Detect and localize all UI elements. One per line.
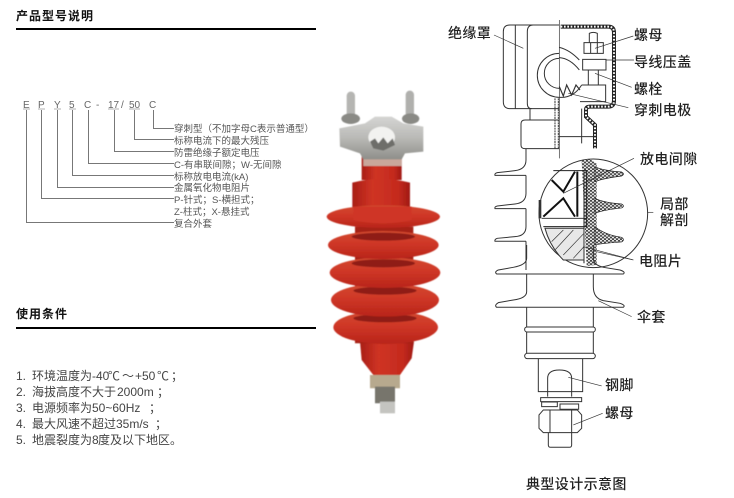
label: resistor disc: 电阻片 [639, 253, 682, 269]
label: shed housing: 伞套 [637, 309, 666, 325]
model code descriptions: 穿刺型（不加字母C表示普通型） [174, 123, 314, 135]
insulating cover [503, 20, 614, 158]
conditions list: +50 [135, 369, 156, 383]
label: insulating cover: 绝缘罩 [448, 25, 491, 41]
heading: operating conditions: 使用条件 [16, 306, 68, 321]
conditions list: 3. [16, 401, 26, 415]
model code descriptions: 复合外套 [174, 218, 213, 230]
body with left sheds [495, 149, 526, 270]
model code descriptions [174, 123, 314, 230]
conditions list: 4. [16, 417, 26, 431]
conditions list: 度及以下地区。 [98, 432, 182, 447]
heading: model designation: 产品型号说明 [16, 8, 94, 23]
label: discharge gap: 放电间隙 [640, 151, 698, 167]
conditions list: ； [157, 385, 169, 399]
label: partial section: 局部 [660, 196, 689, 212]
model code descriptions: Z-柱式；X-悬挂式 [174, 206, 250, 218]
model code descriptions: 防雷绝缘子额定电压 [174, 147, 260, 159]
conditions list [16, 368, 183, 447]
conditions list: 35m/s [116, 417, 149, 431]
model code letters: / [121, 100, 124, 111]
label: bolt: 螺栓 [634, 81, 663, 97]
lower body, sheds, foot and nut [496, 245, 624, 447]
model code descriptions: P-针式；S-横担式； [174, 194, 260, 206]
conditions list: 地震裂度为 [32, 432, 92, 447]
model code letters: - [96, 100, 99, 111]
model code descriptions: 标称放电电流(kA) [174, 171, 248, 183]
conditions list: 2000m [117, 385, 154, 399]
conditions list: 1. [16, 369, 26, 383]
label: wire clamp cover: 导线压盖 [634, 54, 692, 70]
cross-section design diagram [494, 20, 653, 447]
diagram caption: 典型设计示意图 [526, 476, 627, 492]
label: steel foot: 钢脚 [605, 377, 634, 393]
model code letters [23, 100, 156, 111]
model code descriptions: 标称电流下的最大残压 [174, 135, 270, 147]
panel: operating conditions [16, 306, 316, 447]
label: nut: 螺母 [634, 27, 663, 43]
conditions list: 海拔高度不大于 [32, 384, 116, 399]
conditions list: 电源频率为 [32, 400, 92, 415]
label: lower nut: 螺母 [605, 405, 634, 421]
conditions list: 2. [16, 385, 26, 399]
conditions list: ； [171, 369, 183, 383]
model code letters: 50 [129, 100, 141, 111]
conditions list: 最大风速不超过 [32, 416, 116, 431]
model code letters: Y [54, 100, 61, 111]
label: piercing electrode: 穿刺电极 [634, 102, 692, 118]
conditions list: ℃ [108, 369, 120, 383]
conditions list: 环境温度为 [32, 368, 92, 383]
leader lines [494, 35, 634, 425]
conditions list: -40 [92, 369, 110, 383]
conditions list: ； [149, 401, 161, 415]
diagram labels [448, 25, 698, 492]
conditions list: 8 [92, 433, 99, 447]
model code letters: C [149, 100, 156, 111]
conditions list: 50~60Hz [92, 401, 140, 415]
panel: model designation [16, 8, 316, 230]
model code letters: 5 [69, 100, 75, 111]
conditions list: ～ [122, 369, 134, 383]
model code letters: C [84, 100, 91, 111]
model code letters: P [38, 100, 45, 111]
model code descriptions: C-有串联间隙；W-无间隙 [174, 159, 282, 171]
conditions list: ； [155, 417, 167, 431]
section cut-away circle [539, 158, 653, 268]
model code letters: E [23, 100, 30, 111]
model code letters: 17 [108, 100, 120, 111]
leader lines [26, 110, 174, 222]
label: partial section, second line: 解剖 [660, 212, 689, 228]
conditions list: 5. [16, 433, 26, 447]
product photo: red composite arrester [327, 91, 440, 413]
conditions list: ℃ [157, 369, 169, 383]
model code descriptions: 金属氧化物电阻片 [174, 182, 250, 194]
nut, clamp and bolt [537, 32, 606, 148]
